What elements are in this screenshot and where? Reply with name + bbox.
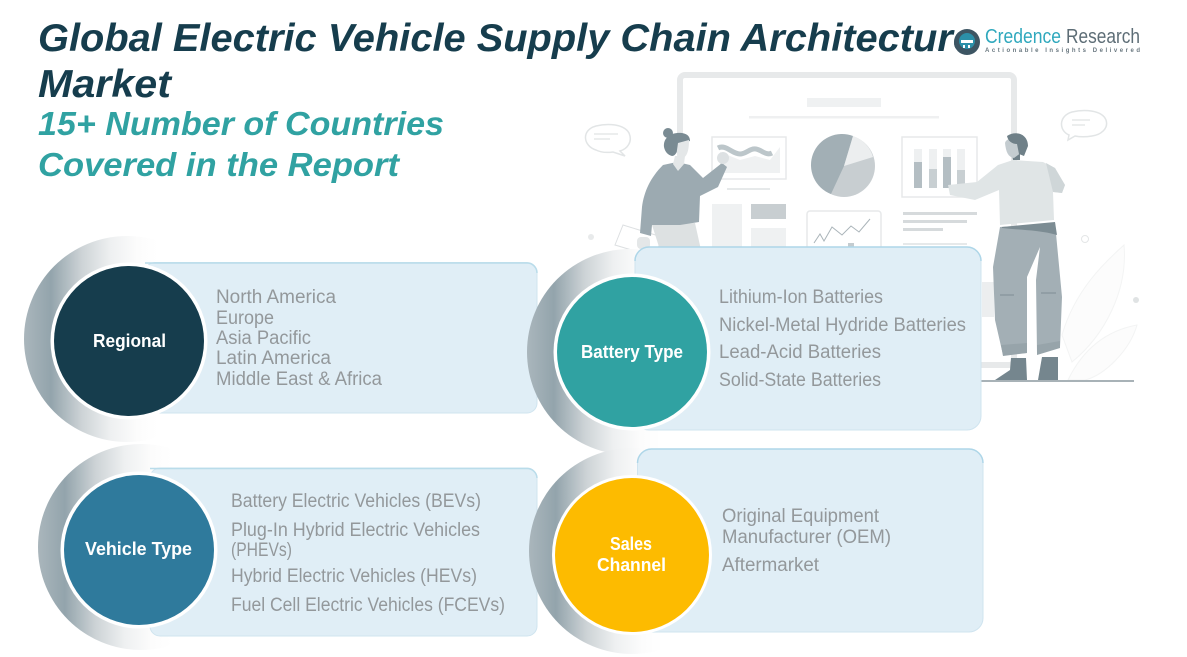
badge: Sales Channel: Sales: [610, 534, 652, 554]
list: battery types: Lead-Acid Batteries: [719, 342, 881, 363]
bar chart card: [902, 137, 977, 197]
woman: [637, 128, 729, 250]
list: vehicle types: (PHEVs): [231, 540, 292, 561]
list: vehicle types: [231, 491, 505, 616]
subtitle: [38, 105, 444, 183]
panel: Battery Type: [527, 247, 981, 455]
pie chart: [811, 134, 875, 197]
list: sales channels: Manufacturer (OEM): [722, 527, 891, 548]
logo: Credence Research: Credence: [985, 26, 1061, 48]
badge: Regional: Regional: [93, 331, 166, 351]
man: [948, 133, 1065, 380]
list: battery types: [719, 287, 966, 391]
badge: Sales Channel: [555, 478, 709, 632]
panel: Sales Channel: [529, 448, 983, 654]
line chart card: [807, 211, 881, 251]
panel: Vehicle Type: [38, 444, 537, 650]
monitor frame: [680, 75, 1014, 365]
decorative dots: [588, 234, 1139, 303]
title: [38, 17, 975, 106]
monitor stand block: [982, 282, 994, 317]
illustration: presentation scene: [585, 75, 1139, 382]
list: vehicle types: Fuel Cell Electric Vehicles (FCEVs): [231, 595, 505, 616]
list: vehicle types: Plug-In Hybrid Electric Vehicles: [231, 520, 480, 541]
left speech bubble: [585, 124, 630, 156]
badge: Regional: [54, 266, 204, 416]
list: regions: Europe: [216, 308, 274, 329]
paper: [615, 225, 662, 257]
list: sales channels: Aftermarket: [722, 555, 820, 576]
list: regions: North America: [216, 287, 336, 308]
list: vehicle types: Hybrid Electric Vehicles (HEVs): [231, 566, 477, 587]
subtitle: Covered in the Report: [38, 146, 401, 183]
list: battery types: Lithium-Ion Batteries: [719, 287, 883, 308]
badge: Battery Type: Battery Type: [581, 342, 683, 362]
list: regions: Latin America: [216, 348, 331, 369]
list: sales channels: [722, 506, 891, 576]
text lines: [903, 212, 977, 245]
area chart card: [712, 137, 786, 179]
right speech bubble: [1061, 111, 1107, 140]
logo icon: [954, 29, 980, 55]
list: sales channels: Original Equipment: [722, 506, 880, 527]
list: battery types: Nickel-Metal Hydride Batteries: [719, 315, 966, 336]
logo: Credence Research: Research: [1066, 26, 1140, 48]
subtitle: 15+ Number of Countries: [38, 105, 444, 142]
background leaves: [1062, 245, 1137, 380]
list: regions: Asia Pacific: [216, 328, 311, 349]
badge: Battery Type: [557, 277, 707, 427]
badge: Sales Channel: Channel: [597, 555, 666, 575]
list: battery types: Solid-State Batteries: [719, 370, 881, 391]
list: vehicle types: Battery Electric Vehicles (BEVs): [231, 491, 481, 512]
title: Market: [38, 63, 173, 106]
list: regions: Middle East & Africa: [216, 369, 382, 390]
title: Global Electric Vehicle Supply Chain Architecture: [38, 17, 975, 60]
badge: Vehicle Type: Vehicle Type: [85, 539, 192, 559]
panel: Regional: [24, 236, 537, 442]
logo: Credence Research: [954, 26, 1140, 55]
logo: Credence Research: Actionable Insights Delivered: [985, 48, 1140, 54]
layout blocks: [712, 188, 786, 247]
list: regions: [216, 287, 382, 390]
badge: Vehicle Type: [64, 475, 214, 625]
ground line: [980, 380, 1134, 382]
